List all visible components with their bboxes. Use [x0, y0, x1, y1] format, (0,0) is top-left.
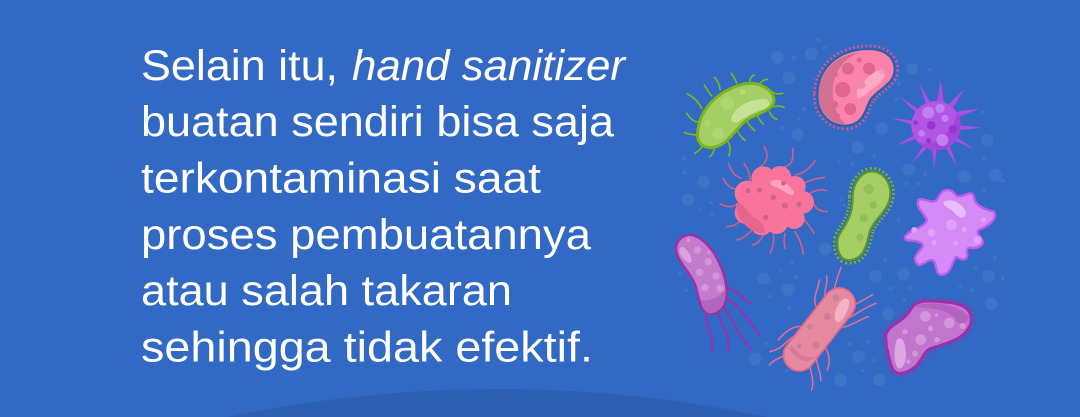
pink fluffy microbe	[720, 147, 827, 254]
text block: hand sanitizer	[352, 43, 627, 90]
text block: atau salah takaran	[141, 268, 512, 315]
text block: sehingga tidak efektif.	[141, 324, 593, 372]
pink kidney bacterium	[818, 49, 894, 126]
text block: terkontaminasi saat	[141, 156, 541, 202]
magenta blob microbe	[886, 301, 971, 373]
text block: Selain itu,	[141, 43, 338, 90]
salmon rod bacterium with flagella	[769, 267, 876, 390]
purple spiky virus	[890, 80, 983, 170]
text block: proses pembuatannya	[141, 212, 591, 259]
text block	[141, 43, 627, 372]
green bean bacterium	[837, 172, 890, 260]
purple rod bacterium with flagella	[676, 235, 759, 352]
violet amoeba	[905, 190, 995, 275]
bottom hill shape	[228, 389, 768, 417]
text block: buatan sendiri bisa saja	[141, 99, 614, 146]
background bubbles	[678, 38, 1005, 387]
green bacterium with hairs	[685, 73, 784, 157]
microbes illustration	[676, 38, 1005, 390]
